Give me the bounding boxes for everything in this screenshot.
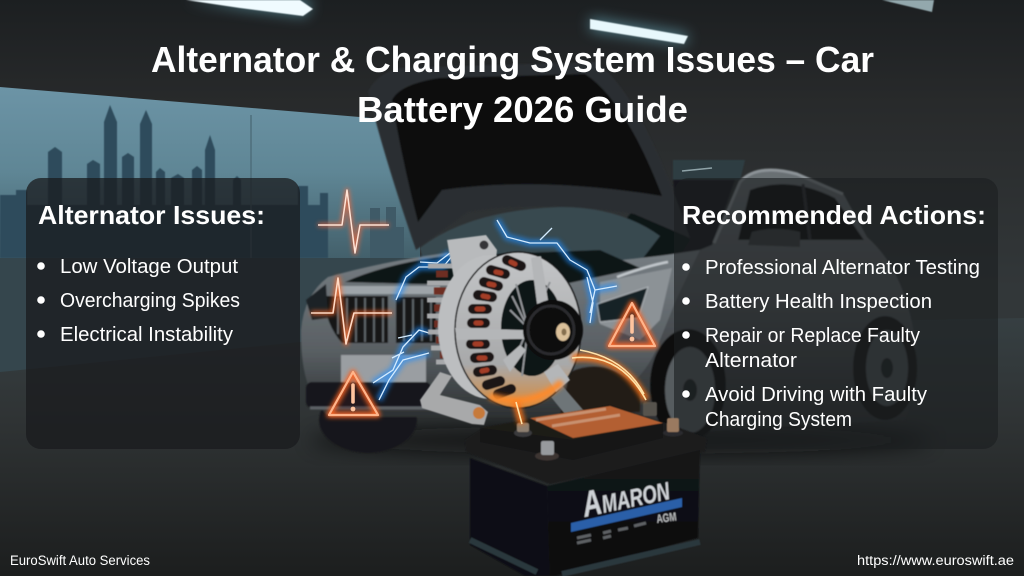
dark cabin near hood: [673, 180, 735, 258]
blue bolts: [373, 220, 617, 400]
icon: warning triangle left: [329, 372, 378, 415]
inner dark disc: [501, 280, 563, 376]
flange: [465, 422, 707, 484]
lower intake: [306, 382, 431, 408]
list: recommended actions: [682, 257, 980, 431]
list: recommended actions: Avoid Driving with Faulty: [705, 384, 927, 406]
icon: pulse lower: [311, 278, 392, 344]
grille bars: [338, 298, 431, 342]
terminal right: [663, 418, 683, 436]
lower mount hole: [473, 407, 485, 419]
fender glint: [617, 262, 668, 277]
spark glow: [516, 357, 646, 424]
list: alternator issues: Overcharging Spikes: [60, 290, 240, 312]
roof glint far: [682, 168, 712, 171]
list: alternator issues: Low Voltage Output: [60, 256, 238, 278]
right headlight: [597, 287, 648, 322]
left face: [470, 458, 550, 576]
blue strip: [571, 498, 682, 532]
ceiling light 3: [882, 0, 934, 12]
engine bay: [345, 250, 640, 285]
pulley grooves: [528, 306, 574, 354]
blue glow: [373, 220, 617, 400]
shaft: [556, 323, 570, 341]
title: Battery 2026 Guide: [357, 89, 688, 130]
list: alternator issues: Electrical Instability: [60, 324, 233, 346]
side windows: [738, 184, 864, 240]
window with skyline: [0, 87, 420, 258]
fins: [427, 266, 456, 362]
panel content: recommended actions: [682, 200, 986, 431]
lower wall left: [0, 258, 420, 372]
base ribs left: [470, 540, 537, 572]
footer: company name: EuroSwift Auto Services: [10, 553, 150, 568]
list: recommended actions: Repair or Replace Faulty: [705, 325, 920, 347]
rear housing ring: [438, 255, 542, 399]
terminal back: [643, 402, 657, 416]
dark rocks under arc: [560, 367, 640, 416]
title: [151, 39, 874, 130]
panel content: alternator issues: [37, 200, 265, 346]
inner spokes: [510, 282, 550, 376]
windshield: [420, 207, 660, 262]
floor shadow: [310, 426, 930, 454]
battery: [465, 402, 707, 576]
shaft hole: [562, 328, 566, 336]
top mount hole: [480, 240, 488, 250]
hood right strut dark: [600, 200, 690, 268]
AGM label: AGM: [656, 510, 677, 526]
door pillar: [803, 184, 810, 240]
terminal centre: [535, 441, 559, 460]
alternator: [420, 235, 583, 425]
brand logo: AMARON: [577, 466, 673, 525]
panel: alternator issues background: [26, 178, 300, 449]
orange lid reflection: [530, 406, 663, 438]
icon: warning triangle right: [609, 303, 655, 346]
license plate: [341, 355, 426, 382]
silver arms: [455, 256, 570, 392]
hood inner panel: [392, 74, 662, 222]
heading: alternator issues: Alternator Issues:: [38, 200, 265, 230]
rear body: [600, 169, 915, 432]
small spec marks: [577, 523, 646, 543]
cooling slots dark: [471, 260, 521, 394]
bumper lip: [310, 406, 450, 410]
front body: [301, 250, 700, 417]
front housing: [455, 252, 581, 408]
ceiling light 1: [185, 0, 313, 16]
pulley: [523, 300, 583, 360]
list: recommended actions: Battery Health Inspection: [705, 291, 932, 313]
wheel: rear: [853, 316, 917, 420]
rear windings: [434, 274, 452, 355]
left headlight: [306, 284, 328, 320]
wheel: front right: [650, 329, 726, 441]
fender highlight: [600, 268, 672, 340]
footer: website: https://www.euroswift.ae: [857, 553, 1014, 568]
heading: recommended actions: Recommended Actions:: [682, 200, 986, 230]
title: Alternator & Charging System Issues – Car: [151, 39, 874, 80]
open hood: [368, 62, 690, 250]
lid front: [480, 423, 663, 460]
spark core: [516, 350, 646, 424]
orange sparks: [516, 350, 646, 424]
list: recommended actions: Professional Alternator Testing: [705, 257, 980, 279]
list: recommended actions: Charging System: [705, 409, 852, 431]
ceiling light 2: [590, 18, 688, 44]
left grille: [323, 296, 388, 343]
list: alternator issues: [37, 256, 240, 346]
upper grille bar: [340, 286, 440, 294]
far towers: [370, 207, 404, 258]
roof glint: [714, 170, 843, 243]
list: recommended actions: Alternator: [705, 350, 797, 372]
panel: recommended actions background: [674, 178, 998, 449]
base ribs right: [562, 542, 700, 574]
terminal left: [514, 423, 532, 437]
top mount: [447, 235, 497, 285]
label glints: [536, 409, 620, 426]
mirror: [748, 229, 800, 247]
lightning blue: [373, 220, 617, 400]
front face: [547, 450, 700, 576]
bottom glow: [490, 382, 562, 401]
lower mount: [420, 372, 488, 425]
icon: pulse top: [318, 190, 389, 253]
car: [301, 62, 917, 453]
lid top: [480, 405, 663, 440]
strut: [547, 383, 585, 418]
wheel: front left: [319, 387, 417, 453]
right grille: [396, 297, 436, 343]
right upper reflection: [673, 160, 745, 180]
floor: [0, 318, 1024, 576]
windings red: [475, 262, 515, 371]
